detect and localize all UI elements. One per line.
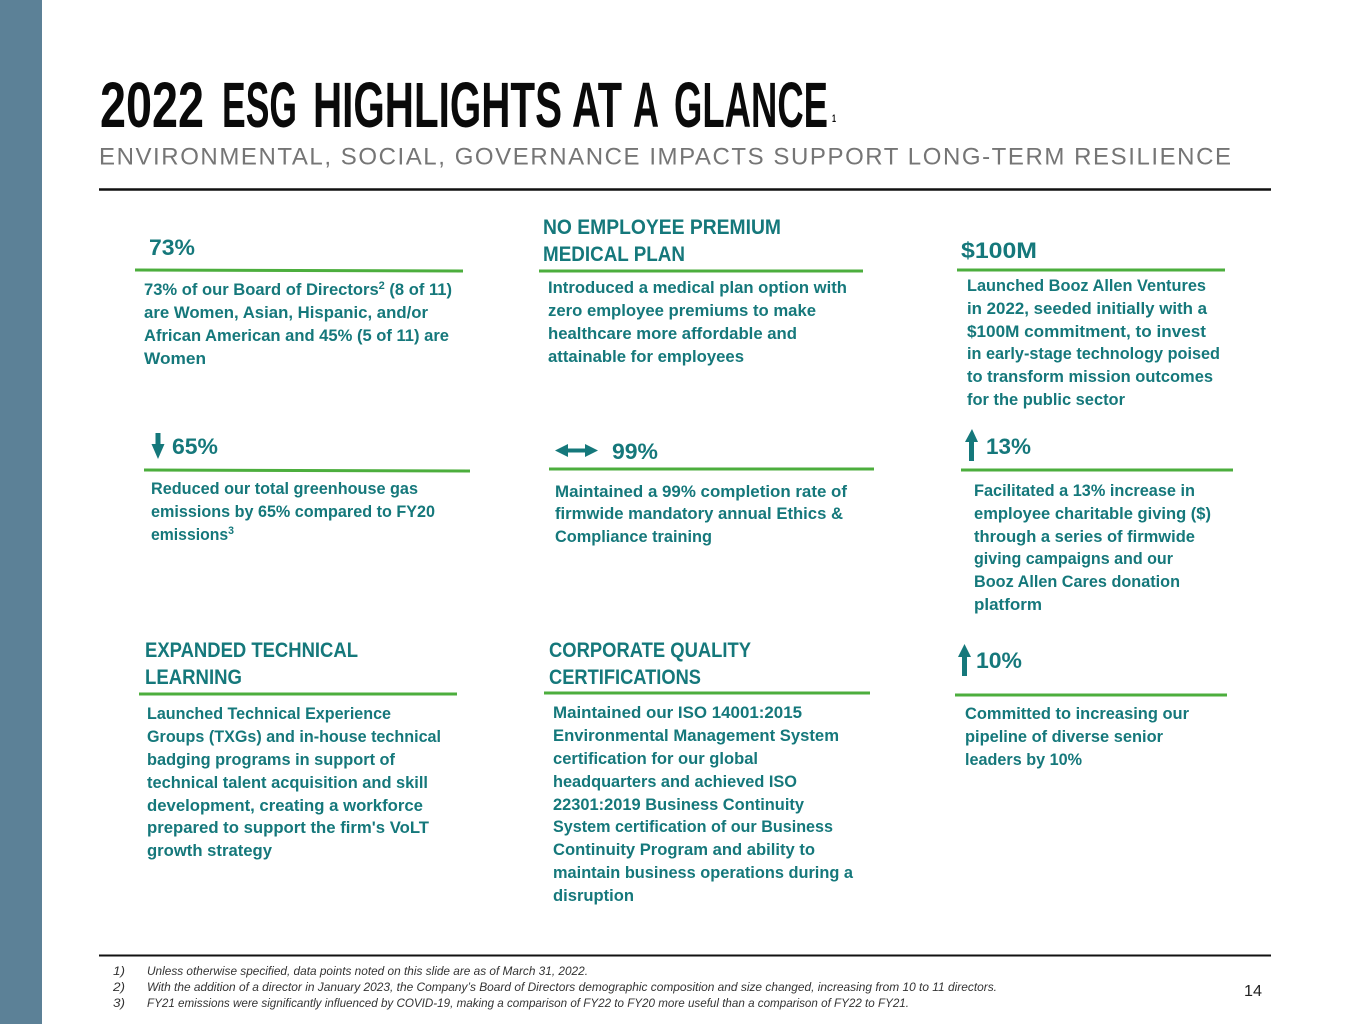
text: certifications: Continuity Program and ability to <box>553 841 815 859</box>
text: medical plan <box>548 279 847 366</box>
footnotes: With the addition of a director in January 2023, the Company’s Board of Directors demographic composition and size changed, increasing from 10 to 11 directors. <box>147 982 997 994</box>
text: giving <box>974 482 1211 614</box>
title: 2022 <box>100 69 204 141</box>
text: ventures: Launched Booz Allen Ventures <box>967 277 1206 295</box>
icon: up arrow <box>965 429 978 461</box>
text: ventures <box>967 277 1220 409</box>
heading: no employee premium medical plan: MEDICAL PLAN <box>543 242 685 266</box>
text: giving: platform <box>974 596 1042 614</box>
panel: no employee premium medical plan <box>539 215 863 366</box>
panel: board diversity 73% <box>135 235 463 368</box>
text: emissions <box>151 480 435 544</box>
panel: expanded technical learning <box>139 638 457 860</box>
text: ethics <box>555 483 848 546</box>
heading: expanded technical learning: LEARNING <box>145 665 242 689</box>
title: 1 <box>832 113 836 125</box>
panel: diverse senior leaders 10% <box>955 644 1227 769</box>
text: medical plan: healthcare more affordable and <box>548 325 797 343</box>
heading: expanded technical learning: EXPANDED TECHNICAL <box>145 638 358 662</box>
text: technical learning: badging programs in support of <box>147 751 395 769</box>
text: technical learning: technical talent acquisition and skill <box>147 774 428 792</box>
text: ventures: in 2022, seeded initially with a <box>967 300 1208 318</box>
heading: 99%: 99% <box>612 439 658 464</box>
heading: 65%: 65% <box>172 434 218 459</box>
panel: $100M ventures <box>957 238 1225 409</box>
footnotes <box>112 966 997 1010</box>
page number: 14 <box>1244 983 1262 1000</box>
heading: no employee premium medical plan <box>543 215 781 266</box>
title: ESG <box>222 69 297 141</box>
text: board diversity: African American and 45% (5 of 11) are <box>144 327 449 345</box>
heading: 13%: 13% <box>986 434 1031 459</box>
panel: ethics training 99% <box>549 439 874 546</box>
text: technical learning: prepared to support the firm's VoLT <box>147 819 429 837</box>
icon: up arrow <box>958 644 971 676</box>
text: giving: giving campaigns and our <box>974 550 1174 568</box>
text: certifications: maintain business operations during a <box>553 864 854 882</box>
footnotes: 2) <box>112 982 125 994</box>
text: certifications <box>553 704 854 905</box>
heading: corporate quality certifications: CORPORATE QUALITY <box>549 638 751 662</box>
text: giving: Facilitated a 13% increase in <box>974 482 1195 500</box>
heading: no employee premium medical plan: NO EMPLOYEE PREMIUM <box>543 215 781 239</box>
text: giving: Booz Allen Cares donation <box>974 573 1180 591</box>
text: giving: through a series of firmwide <box>974 528 1195 546</box>
text: technical learning: Launched Technical Experience <box>147 705 391 723</box>
text: giving: employee charitable giving ($) <box>974 505 1211 523</box>
text: certifications: Environmental Management System <box>553 727 839 745</box>
text: diverse leaders <box>965 705 1190 769</box>
text: diverse leaders: Committed to increasing our <box>965 705 1190 723</box>
panel: charitable giving 13% <box>961 429 1233 614</box>
heading: corporate quality certifications: CERTIFICATIONS <box>549 665 701 689</box>
text: certifications: 22301:2019 Business Continuity <box>553 796 805 814</box>
text: board diversity: 2 <box>379 280 385 292</box>
text: ethics: Compliance training <box>555 528 712 546</box>
footnotes: 3) <box>113 998 125 1010</box>
panel: corporate quality certifications <box>544 638 870 905</box>
text: certifications: certification for our global <box>553 750 758 768</box>
text: diverse leaders: leaders by 10% <box>965 751 1082 769</box>
text: medical plan: Introduced a medical plan option with <box>548 279 847 297</box>
text: emissions: 3 <box>228 525 234 537</box>
text: medical plan: attainable for employees <box>548 348 744 366</box>
text: ethics: Maintained a 99% completion rate of <box>555 483 848 501</box>
title: AT <box>572 69 622 141</box>
subtitle: ENVIRONMENTAL, SOCIAL, GOVERNANCE IMPACTS SUPPORT LONG-TERM RESILIENCE <box>99 144 1231 170</box>
text: technical learning: growth strategy <box>147 842 273 860</box>
text: ventures: in early-stage technology poised <box>967 345 1220 363</box>
text: emissions: emissions <box>151 526 232 544</box>
text: certifications: headquarters and achieved ISO <box>553 773 797 791</box>
heading: expanded technical learning <box>145 638 358 689</box>
footnotes: 1) <box>113 966 125 978</box>
icon: double arrow <box>555 444 598 457</box>
icon: down arrow <box>152 433 164 459</box>
text: certifications: disruption <box>553 887 634 905</box>
sidebar <box>0 0 42 1024</box>
text: technical learning: development, creating a workforce <box>147 797 423 815</box>
text: medical plan: zero employee premiums to make <box>548 302 816 320</box>
text: board diversity: Women <box>144 350 206 368</box>
title: HIGHLIGHTS <box>313 69 562 141</box>
heading: $100M: $100M <box>961 238 1037 263</box>
title: A <box>633 69 659 141</box>
text: emissions: Reduced our total greenhouse gas <box>151 480 418 498</box>
text: emissions: emissions by 65% compared to FY20 <box>151 503 435 521</box>
footnotes: Unless otherwise specified, data points noted on this slide are as of March 31, 2022. <box>147 966 588 978</box>
text: technical learning <box>147 705 441 860</box>
text: ventures: $100M commitment, to invest <box>967 323 1207 341</box>
heading: corporate quality certifications <box>549 638 751 689</box>
panel: greenhouse gas 65% <box>144 433 470 544</box>
text: board diversity <box>144 280 452 368</box>
text: certifications: System certification of our Business <box>553 818 833 836</box>
footnotes: FY21 emissions were significantly influenced by COVID-19, making a comparison of FY22 to FY20 more useful than a comparison of FY22 to FY21. <box>147 998 909 1010</box>
text: board diversity: 73% of our Board of Directors <box>144 281 378 299</box>
heading: 73%: 73% <box>149 235 195 260</box>
title: GLANCE <box>674 69 828 141</box>
text: certifications: Maintained our ISO 14001:2015 <box>553 704 802 722</box>
text: ethics: firmwide mandatory annual Ethics & <box>555 505 843 523</box>
text: diverse leaders: pipeline of diverse senior <box>965 728 1164 746</box>
heading: 10%: 10% <box>976 648 1022 673</box>
text: board diversity: (8 of 11) <box>385 281 452 299</box>
text: technical learning: Groups (TXGs) and in-house technical <box>147 728 441 746</box>
text: ventures: to transform mission outcomes <box>967 368 1213 386</box>
title <box>100 69 836 141</box>
text: ventures: for the public sector <box>967 391 1126 409</box>
text: board diversity: are Women, Asian, Hispanic, and/or <box>144 304 429 322</box>
